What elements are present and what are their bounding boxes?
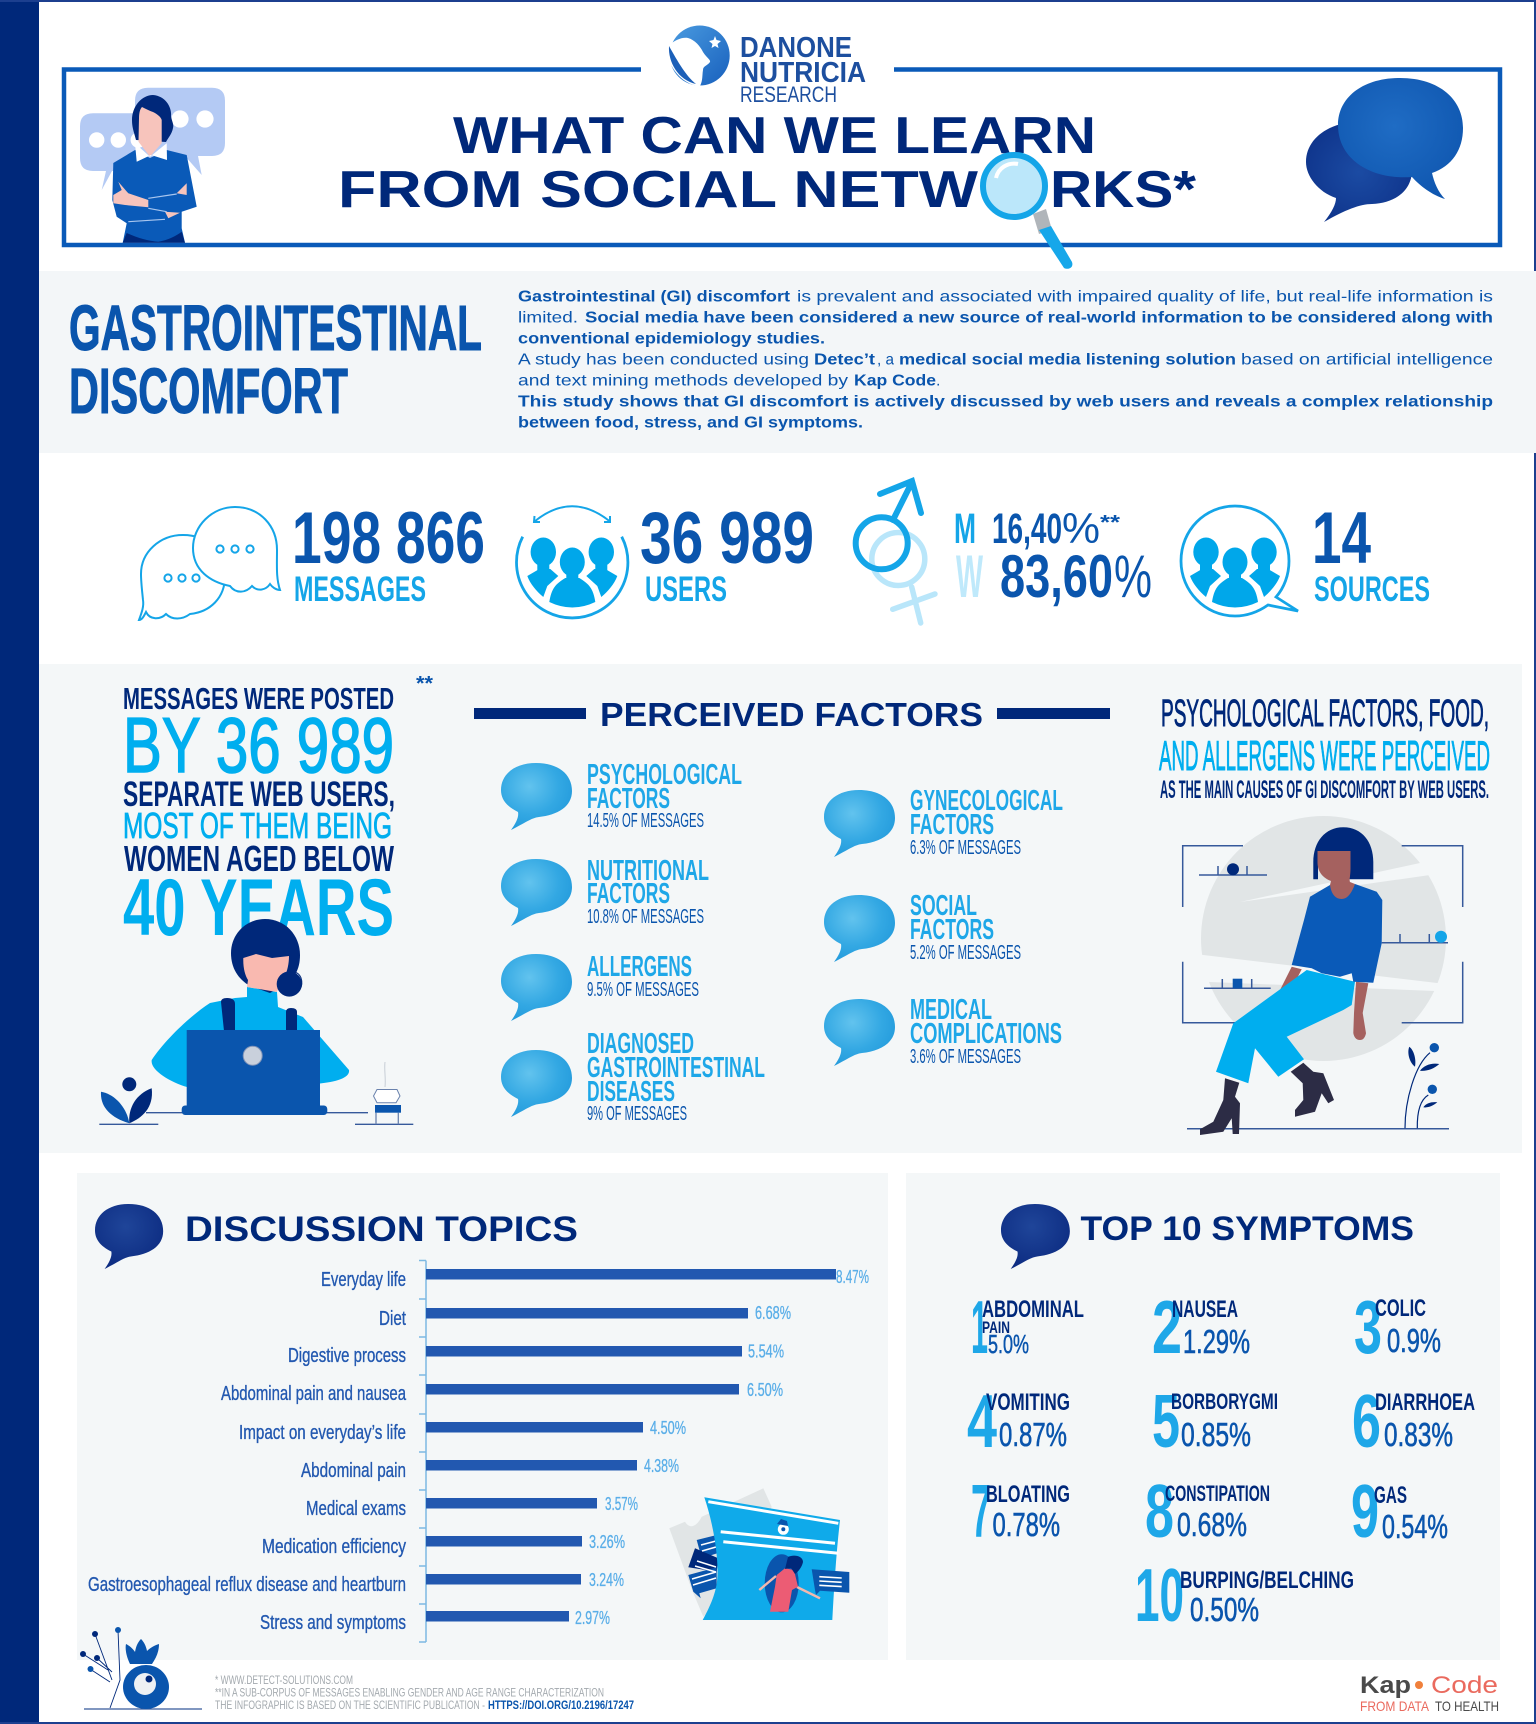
intro text block: limited. (518, 310, 578, 326)
panel: top 10 symptoms (906, 1173, 1500, 1660)
stat: gender split: 16,40 (992, 505, 1062, 553)
stat: messages (139, 498, 485, 620)
illustration: blue chat bubbles (1306, 78, 1463, 222)
stat: gender split: M (954, 505, 976, 553)
symptom 5: BORBORYGMI (1171, 1389, 1278, 1414)
panel: main causes (1123, 664, 1522, 1153)
intro text block: Social media have been considered a new source of real-world information to be considered along with (585, 310, 1493, 326)
title (338, 107, 1197, 219)
icon: magnifying glass (983, 155, 1072, 269)
bar chart: discussion topics: Everyday life (321, 1269, 406, 1291)
symptom 10: 0.50% (1190, 1591, 1259, 1628)
symptom 5: 5 (1152, 1379, 1180, 1463)
symptom 1: ABDOMINAL (982, 1296, 1084, 1323)
illustration: seated woman with shelves (1183, 816, 1463, 1135)
symptom 6 (1352, 1379, 1475, 1463)
symptom 5 (1152, 1379, 1278, 1463)
symptom 7: 7 (971, 1469, 991, 1553)
symptom 2: 2 (1152, 1285, 1182, 1369)
stat: users: 36 989 (640, 498, 814, 579)
factor: nutritional: NUTRITIONAL (587, 855, 709, 887)
footnotes: THE INFOGRAPHIC IS BASED ON THE SCIENTIFIC PUBLICATION - (215, 1698, 485, 1712)
symptom 8: CONSTIPATION (1165, 1481, 1270, 1506)
bar chart: discussion topics: 2.97% (575, 1608, 610, 1628)
symptom 4: 0.87% (999, 1416, 1067, 1453)
bar chart: discussion topics: Digestive process (288, 1345, 406, 1367)
symptom 6: 6 (1352, 1379, 1381, 1463)
symptom 7: 0.78% (992, 1506, 1060, 1543)
symptom 6: 0.83% (1384, 1416, 1453, 1453)
factor: social: FACTORS (910, 914, 994, 946)
icon: users in circle (516, 506, 628, 618)
logo: Danone Nutricia Research: RESEARCH (740, 82, 837, 107)
bar chart: discussion topics: Diet (379, 1308, 406, 1330)
factor: gynecological: GYNECOLOGICAL (910, 785, 1063, 817)
intro text block: Kap Code (854, 372, 936, 390)
bar chart: discussion topics: 3.26% (589, 1532, 625, 1552)
bar chart: discussion topics: Stress and symptoms (260, 1612, 406, 1634)
symptom 1: PAIN (982, 1318, 1010, 1337)
logo: Kap Code (1360, 1672, 1499, 1714)
bar chart: discussion topics: Impact on everyday’s life (239, 1422, 406, 1444)
factor: nutritional: FACTORS (587, 878, 670, 910)
factor: allergens: 9.5% OF MESSAGES (587, 979, 699, 1001)
icon: navy speech bubble (95, 1204, 163, 1269)
panel: perceived factors (463, 664, 1124, 1153)
illustration: woman stepping out of web page (669, 1488, 849, 1620)
footnotes: HTTPS://DOI.ORG/10.2196/17247 (488, 1698, 634, 1712)
factor: nutritional (501, 855, 709, 928)
intro text block: is prevalent and associated with impaired quality of life, but real-life information is (797, 288, 1493, 306)
illustration: person with chat bubbles (80, 88, 225, 243)
symptom 9 (1351, 1469, 1448, 1553)
factor: gynecological: 6.3% OF MESSAGES (910, 837, 1021, 859)
stat: sources (1181, 498, 1430, 616)
bar chart: discussion topics: Gastroesophageal reflux disease and heartburn (88, 1574, 406, 1596)
heading: gastrointestinal discomfort (69, 292, 482, 427)
logo: Kap Code: Kap (1360, 1672, 1411, 1699)
web user statement (123, 673, 433, 953)
symptom 8: 0.68% (1177, 1506, 1247, 1543)
heading: perceived factors (474, 696, 1110, 733)
web user statement: SEPARATE WEB USERS, (123, 775, 395, 814)
icon: two chat bubbles (139, 507, 280, 620)
factor: medical complications: 3.6% OF MESSAGES (910, 1046, 1021, 1068)
intro text block: and text mining methods developed by (518, 372, 848, 390)
intro text block: . (936, 372, 940, 390)
heading: perceived factors: PERCEIVED FACTORS (600, 696, 983, 733)
symptom 8 (1145, 1469, 1270, 1553)
web user statement: 40 YEARS (123, 863, 394, 953)
intro text block: conventional epidemiology studies. (518, 330, 825, 348)
web user statement: MESSAGES WERE POSTED (123, 681, 394, 716)
bar chart: discussion topics (88, 1260, 869, 1642)
factor: social (824, 890, 1021, 964)
logo: Kap Code: FROM DATA (1360, 1698, 1430, 1714)
icon: users in speech bubble (1181, 506, 1298, 616)
symptom 7 (971, 1469, 1070, 1553)
main causes statement (1159, 693, 1490, 804)
bar chart: discussion topics: 4.38% (644, 1456, 679, 1476)
title: RKS* (1050, 161, 1197, 219)
stat: messages: 198 866 (292, 498, 485, 579)
heading: gastrointestinal discomfort: GASTROINTESTINAL (69, 292, 482, 364)
title: WHAT CAN WE LEARN (453, 107, 1096, 165)
symptom 7: BLOATING (986, 1481, 1070, 1508)
symptom 8: 8 (1145, 1469, 1174, 1553)
symptom 4: VOMITING (986, 1389, 1070, 1416)
factor: diagnosed gastrointestinal diseases: DISEASES (587, 1076, 675, 1108)
web user statement: BY 36 989 (123, 701, 394, 789)
factor: diagnosed gastrointestinal diseases: 9% OF MESSAGES (587, 1103, 687, 1125)
symptom 4: 4 (967, 1379, 997, 1463)
factor: allergens: ALLERGENS (587, 951, 692, 983)
factor: nutritional: 10.8% OF MESSAGES (587, 906, 704, 928)
icon: female symbol (872, 532, 935, 623)
stat: gender split: ** (1100, 512, 1120, 534)
stat: gender split: 83,60 (1000, 543, 1113, 610)
icon: navy speech bubble (1001, 1204, 1070, 1269)
symptom 2: 1.29% (1183, 1323, 1250, 1360)
factor: psychological: PSYCHOLOGICAL (587, 759, 742, 791)
bar chart: discussion topics: Abdominal pain (301, 1460, 406, 1482)
symptom 10: 10 (1135, 1553, 1184, 1637)
logo: Kap Code: TO HEALTH (1435, 1698, 1499, 1714)
factor: diagnosed gastrointestinal diseases: DIAGNOSED (587, 1028, 694, 1060)
stat: sources: SOURCES (1314, 570, 1430, 609)
factor: gynecological (824, 785, 1063, 859)
symptom 4 (967, 1379, 1070, 1463)
heading: discussion topics: DISCUSSION TOPICS (185, 1210, 578, 1249)
factor: medical complications (824, 994, 1062, 1068)
heading: top 10 symptoms: TOP 10 SYMPTOMS (1080, 1210, 1414, 1248)
logo: Kap Code: Code (1431, 1672, 1498, 1699)
bar chart: discussion topics: Medication efficiency (262, 1536, 406, 1558)
bar chart: discussion topics: Medical exams (306, 1498, 406, 1520)
logo: Danone Nutricia Research: NUTRICIA (740, 57, 866, 89)
stat: users (516, 498, 814, 618)
stat: users: USERS (645, 570, 727, 609)
bar chart: discussion topics: 5.54% (748, 1342, 784, 1362)
symptom 9: 9 (1351, 1469, 1379, 1553)
panel: web user profile (39, 664, 464, 1153)
panel: discussion topics (77, 1173, 888, 1660)
bar chart: discussion topics: 4.50% (650, 1418, 686, 1438)
icon: male symbol (856, 481, 921, 569)
web user statement: ** (416, 673, 433, 695)
title: FROM SOCIAL NETW (338, 161, 979, 219)
stat: gender split: W (956, 543, 983, 610)
bar chart: discussion topics: 8.47% (836, 1267, 869, 1287)
symptom 3 (1354, 1285, 1441, 1369)
factor: psychological: 14.5% OF MESSAGES (587, 810, 704, 832)
stat: sources: 14 (1312, 498, 1371, 579)
intro text block (518, 288, 1493, 432)
factor: social: 5.2% OF MESSAGES (910, 942, 1021, 964)
intro text block: , a (877, 352, 894, 368)
heading: gastrointestinal discomfort: DISCOMFORT (69, 355, 348, 427)
symptom 10 (1135, 1553, 1354, 1637)
intro text block: This study shows that GI discomfort is actively discussed by web users and reveals a complex relationship (518, 394, 1493, 410)
intro text block: A study has been conducted using (518, 352, 809, 368)
logo: Danone Nutricia Research (668, 26, 866, 107)
intro text block: medical social media listening solution (899, 352, 1236, 368)
bar chart: discussion topics: 6.68% (755, 1303, 791, 1323)
factor: medical complications: MEDICAL (910, 994, 992, 1026)
bar chart: discussion topics: 3.57% (605, 1494, 638, 1514)
factor: allergens (501, 951, 699, 1021)
symptom 9: 0.54% (1382, 1508, 1448, 1545)
logo: Danone Nutricia Research: DANONE (740, 32, 852, 64)
symptom 2: NAUSEA (1172, 1296, 1238, 1323)
intro text block: Detec’t (814, 352, 876, 368)
symptom 1 (971, 1285, 1084, 1369)
symptom 3: 3 (1354, 1285, 1382, 1369)
factor: psychological (501, 759, 742, 832)
intro text block: Gastrointestinal (GI) discomfort (518, 288, 791, 306)
bar chart: discussion topics: Abdominal pain and nausea (221, 1383, 407, 1405)
symptom 9: GAS (1374, 1482, 1407, 1509)
intro text block: based on artificial intelligence (1241, 352, 1493, 368)
footnotes (215, 1673, 634, 1712)
left sidebar (0, 0, 39, 1724)
web user statement: MOST OF THEM BEING (123, 805, 392, 846)
symptom 1: 1 (971, 1285, 988, 1369)
factor: social: SOCIAL (910, 890, 977, 922)
factor: gynecological: FACTORS (910, 809, 994, 841)
factor: psychological: FACTORS (587, 783, 670, 815)
stat: messages: MESSAGES (294, 570, 426, 609)
symptom 1: 5.0% (988, 1329, 1029, 1359)
symptom 5: 0.85% (1181, 1416, 1251, 1453)
stat: gender split: % (1114, 543, 1152, 610)
illustration: woman at laptop (99, 919, 413, 1124)
stat: gender split: % (1062, 505, 1100, 553)
stat: gender split (856, 481, 1152, 623)
bar chart: discussion topics: 3.24% (589, 1570, 624, 1590)
symptom 2 (1152, 1285, 1250, 1369)
symptom 6: DIARRHOEA (1375, 1389, 1475, 1416)
symptom 3: 0.9% (1387, 1322, 1441, 1359)
factor: diagnosed gastrointestinal diseases (501, 1028, 765, 1125)
bar chart: discussion topics: 6.50% (747, 1380, 783, 1400)
web user statement: WOMEN AGED BELOW (124, 838, 394, 879)
symptom 10: BURPING/BELCHING (1180, 1567, 1354, 1594)
illustration: footer plant (80, 1627, 202, 1709)
factor: medical complications: COMPLICATIONS (910, 1018, 1062, 1050)
panel: gastrointestinal discomfort intro (39, 271, 1536, 453)
footnotes: * WWW.DETECT-SOLUTIONS.COM (215, 1673, 353, 1687)
symptom 3: COLIC (1375, 1295, 1426, 1322)
intro text block: between food, stress, and GI symptoms. (518, 414, 863, 432)
factor: diagnosed gastrointestinal diseases: GASTROINTESTINAL (587, 1052, 765, 1084)
footnotes: **IN A SUB-CORPUS OF MESSAGES ENABLING GENDER AND AGE RANGE CHARACTERIZATION (215, 1686, 604, 1700)
header frame (64, 70, 1500, 245)
